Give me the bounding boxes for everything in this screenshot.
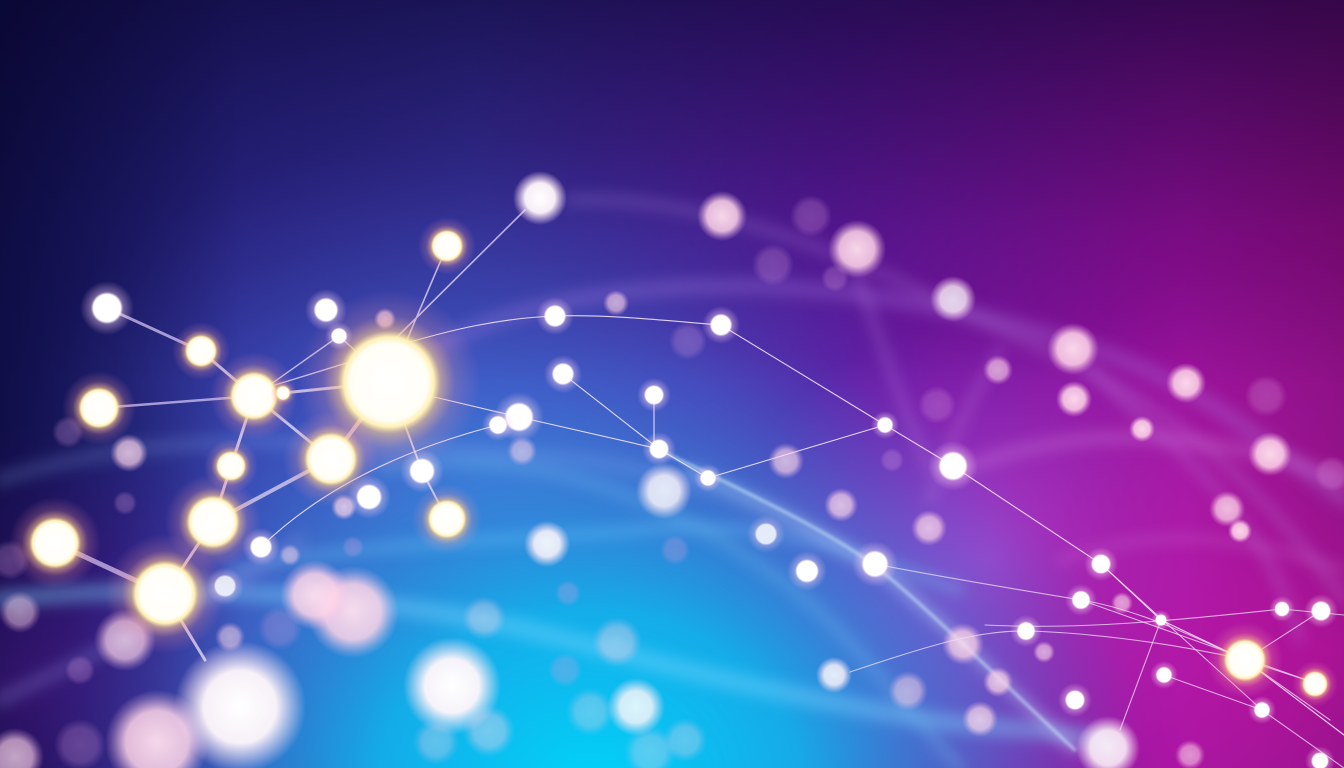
network lines	[55, 210, 1344, 768]
lines: central arc	[261, 316, 1344, 735]
soft pink nodes	[0, 191, 1292, 768]
lines: left cluster	[55, 210, 525, 660]
blurred wave bands	[0, 200, 1344, 768]
glowing warm nodes	[9, 217, 1338, 707]
lines: bright streak	[660, 450, 1075, 750]
dim background nodes	[0, 195, 1344, 768]
crisp white nodes	[80, 171, 1338, 768]
lines: right cluster	[850, 564, 1344, 768]
